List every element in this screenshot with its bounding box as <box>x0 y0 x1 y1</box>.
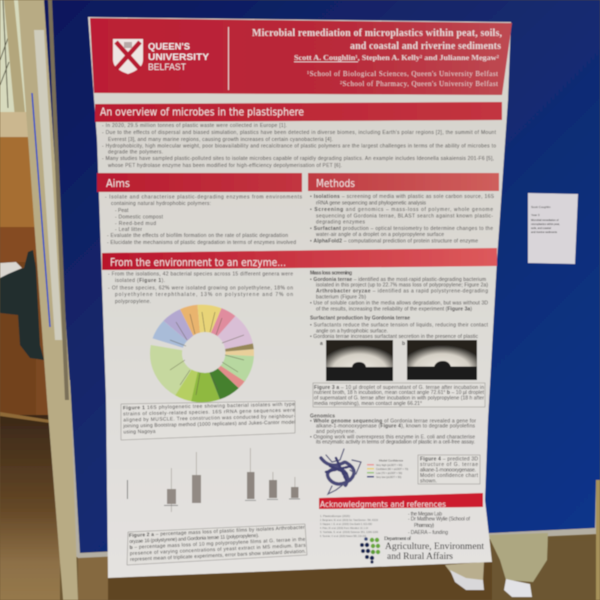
surfactant text <box>310 316 489 340</box>
left shoe <box>450 570 484 590</box>
DAERA wordmark <box>384 535 484 562</box>
model confidence legend: Low (70 > pLDDT > 50) <box>376 472 402 475</box>
overview bullet text <box>102 123 497 169</box>
isolation results text: polyethylene terephthalate, 13% on polystyrene and 7% on <box>115 292 293 298</box>
figure 1 caption: using Nagoya <box>123 429 156 435</box>
mass loss text: bacterium (Figure 2b) <box>316 294 366 300</box>
figure 1 caption: Figure 1 16S phylogenetic tree showing bacterial isolates with type <box>123 402 295 411</box>
affiliations: ¹School of Biological Sciences, Queen's University Belfast <box>307 70 498 78</box>
bar 1 <box>164 468 178 512</box>
model confidence legend: Very low (pLDDT < 50) <box>376 476 401 479</box>
figure 3 caption: of supernatant of G. terrae after incubation in with polypropylene (18 h after <box>314 396 484 402</box>
right shoe <box>504 579 532 597</box>
white cloth <box>0 262 22 278</box>
title: and coastal and riverine sediments <box>350 41 501 52</box>
aims list: - Peat <box>115 208 129 214</box>
logo wordmark <box>148 42 210 73</box>
figure 2 caption: Figure 2 a – percentage mass loss of plastic films by isolates Arthrobacter <box>129 525 305 539</box>
figure 4 caption: alkane-1-monooxygenase. <box>420 468 476 474</box>
isolation results text: - From the isolations, 42 bacterial species across 15 different genera were <box>108 272 293 278</box>
genomics text <box>310 414 476 446</box>
mass loss text: isolated in this project (up to 22.7% mass loss of polypropylene; Figure 2a) <box>316 282 488 288</box>
figure 3 caption: media replenishing), mean contact angle 66.21° <box>314 401 422 407</box>
mass loss text: • Gordonia terrae – identified as the most-rapid plastic-degrading bacterium <box>310 277 486 283</box>
bar 2 <box>192 452 201 503</box>
side note paper: Year 3 <box>531 213 540 217</box>
logo wordmark: QUEEN'S <box>148 42 190 52</box>
heading: acknowledgments: Acknowledgments and references <box>320 500 446 509</box>
genomics text: and polystyrene. <box>316 429 356 435</box>
acknowledgments list <box>408 512 471 536</box>
figure 1 caption: strains of closely-related species. 16S rRNA gene sequences were <box>123 408 295 417</box>
chart: mass loss bars <box>127 448 300 512</box>
figure 3 caption: Figure 3 a – 10 µl droplet of supernatant of G. terrae after incubation in <box>314 385 484 391</box>
aims list: - Leaf litter <box>115 227 142 233</box>
panel: poster sheet <box>88 17 512 578</box>
mass loss text: Arthrobacter oryzae – identified as a rapid polystyrene-degrading <box>316 288 488 294</box>
references: 4. Pinto, M. et al. (2019) Front. Microbiol. 10, 1-14 <box>320 526 368 530</box>
aims list: - Elucidate the mechanisms of plastic degradation in terms of enzymes involved <box>107 240 296 246</box>
figure 1 caption: joining using Bootstrap method (1000 replicates) and Jukes-Cantor model <box>122 420 295 430</box>
methods list: water-air angle of a droplet on a polypropylene surface <box>316 232 444 238</box>
droplet image b: b <box>402 341 405 347</box>
methods list: degrading enzymes <box>316 220 366 226</box>
overview bullet text: - In 2020, 29.5 million tonnes of plastic waste were collected in Europe [1]. <box>102 123 287 129</box>
figure 2 caption: oryzae 16 (polystyrene) and Gordonia terrae 11 (polypropylene). <box>129 533 259 545</box>
references <box>320 514 378 538</box>
overview bullet text: degrade the polymers. <box>108 150 163 156</box>
aims list: - Isolate and characterise plastic-degrading enzymes from environments <box>105 194 302 200</box>
side note paper: soils, and coastal <box>531 226 551 230</box>
aims list: - Domestic compost <box>115 214 164 220</box>
isolation results text <box>108 272 293 305</box>
right leg behind the poster <box>488 533 548 597</box>
icon: DAERA logo <box>360 537 380 564</box>
acknowledgments list: - Dr Matthew Wylie (School of <box>408 516 471 522</box>
droplet image b <box>402 340 477 380</box>
droplet image a <box>320 340 393 381</box>
DAERA wordmark: and Rural Affairs <box>387 551 453 562</box>
aims list: - Reed-bed mud <box>115 221 156 227</box>
overview bullet text: Everest [3], and many marine regions, causing growth increases of certain cyanobacteria [4]. <box>108 137 333 143</box>
overview bullet text: - Hydrophobicity, high molecular weight, poor bioavailability and recalcitrance of plastic polymers are the largest challenges in terms of the ability of microbes to <box>102 144 496 150</box>
figure 3 caption: nutrient broth, 18 h incubation, mean contact angle 72.61° b – 10 µl droplet <box>314 390 485 396</box>
title <box>252 28 502 52</box>
heading: from the environment: From the environment to an enzyme... <box>110 257 286 269</box>
surfactant text: Surfactant production by Gordonia terrae <box>310 316 410 322</box>
surfactant text: • Gordonia terrae increases surfactant secretion in the presence of plastic <box>310 334 478 340</box>
aims list: - Evaluate the effects of biofilm formation on the rate of plastic degradation <box>107 233 288 239</box>
isolation results text: - Of these species, 62% were isolated growing on polyethylene, 18% on <box>108 286 293 292</box>
heading: overview <box>95 102 502 122</box>
overview bullet text: - Many studies have sampled plastic-polluted sites to isolate microbes capable of rapidly degrading plastics. An example includes Ideonella sakaiensis 201-F6 [5], <box>102 156 494 162</box>
figure 4 caption: shown. <box>420 478 437 484</box>
acknowledgments list: Pharmacy) <box>414 523 434 529</box>
methods list <box>310 194 495 244</box>
DAERA wordmark: Department of <box>384 535 411 542</box>
figure 2 caption: represent mean of triplicate experiments, error bars show standard deviation. <box>130 549 306 563</box>
aims list <box>105 194 302 246</box>
left leg behind the poster <box>445 562 484 590</box>
figure 3 caption <box>313 383 485 407</box>
bag on bench <box>0 250 44 360</box>
droplet image a: a <box>320 341 323 347</box>
board frame <box>64 380 600 558</box>
affiliations <box>307 70 498 88</box>
DAERA wordmark: Agriculture, Environment <box>385 542 484 552</box>
mass loss text: Mass loss screening <box>310 270 352 276</box>
isolation results text: isolated (Figure 1). <box>115 278 165 284</box>
bar 4 <box>267 472 278 500</box>
bar 3 <box>245 448 256 501</box>
genomics text: • Whole genome sequencing of Gordonia terrae revealed a gene for <box>310 418 476 424</box>
mass loss text <box>310 270 488 312</box>
surfactant text: • Surfactants reduce the surface tension of liquids, reducing their contact <box>310 322 489 328</box>
genomics text: Genomics <box>310 414 335 420</box>
methods list: • Surfactant production – optical tensiometry to determine changes to the <box>310 226 493 232</box>
figure 2 caption: presence of varying concentrations of yeast extract in MS medium. Bars <box>130 543 306 557</box>
heading: aims: Aims <box>106 178 130 190</box>
heading: methods <box>308 173 499 191</box>
aims list: containing natural hydrophobic polymers: <box>111 201 211 207</box>
figure 2 caption <box>127 524 307 565</box>
mass loss text: • Use of soluble carbon in the media allows degradation, but was without 3D <box>310 300 488 306</box>
isolation results text: polypropylene. <box>115 299 151 305</box>
heading: aims <box>97 173 302 192</box>
icon: university crest <box>113 39 143 74</box>
side note paper: and riverine sediments <box>531 230 558 234</box>
chart: phylogenetic wheel <box>151 306 253 401</box>
figure 4 caption: structure of G. terrae <box>420 462 478 468</box>
logo wordmark: UNIVERSITY <box>148 52 210 63</box>
logo wordmark: BELFAST <box>148 62 186 73</box>
model confidence legend: Model Confidence <box>379 458 404 462</box>
side note paper: Microbial remediation of <box>531 218 559 222</box>
authors: Scott A. Coughlin¹, Stephen A. Kelly² and Julianne Megaw² <box>294 54 499 62</box>
surfactant text: angle on a hydrophobic surface. <box>316 328 388 334</box>
figure 1 caption: aligned by MUSCLE. Tree construction was conducted by neighbour- <box>123 414 296 423</box>
methods list: • AlphaFold2 – computational prediction of protein structure of enzyme <box>310 238 478 244</box>
methods list: • Isolations – screening of media with plastic as sole carbon source, 16S <box>310 194 495 200</box>
title: Microbial remediation of microplastics within peat, soils, <box>252 28 502 39</box>
methods list: sequencing of Gordonia terrae, BLAST search against known plastic- <box>316 214 493 220</box>
affiliations: ²School of Pharmacy, Queen's University Belfast <box>340 80 498 88</box>
genomics text: its enzymatic activity in terms of degradation of plastic in a cell-free assay. <box>316 440 475 446</box>
figure 4 caption: Figure 4 – predicted 3D <box>420 456 478 462</box>
mass loss text: of the results, increasing the reliability of the experiment (Figure 3a) <box>316 306 472 312</box>
methods list: • Screening and genomics – mass-loss of polymer, whole genome <box>310 207 493 213</box>
figure 4 caption <box>418 455 480 484</box>
references: 2. Bergmann, M. et al. (2019) Sci. Total Environ. 784, 43219 <box>320 518 378 522</box>
model confidence legend <box>367 458 408 479</box>
heading: from the environment <box>102 248 497 270</box>
heading: methods: Methods <box>316 178 355 190</box>
figure 1 caption <box>121 401 296 440</box>
model confidence legend: Confident (90 > pLDDT > 70) <box>376 468 408 471</box>
side note paper: Scott Coughlin <box>531 205 551 209</box>
overview bullet text: - Due to the effects of dispersal and biased simulation, plastics have been detected in diverse biomes, including Earth's polar regions [2], the summit of Mount <box>102 130 497 136</box>
protein structure model <box>321 449 361 494</box>
side note paper <box>528 193 578 264</box>
references: 3. Napper, I. E. et al. (2020) One Earth 3, 621-630 <box>320 522 372 526</box>
model confidence legend: Very high (pLDDT > 90) <box>376 464 402 467</box>
heading: overview: An overview of microbes in the plastisphere <box>100 106 304 118</box>
figure 4 caption: Model confidence chart <box>420 473 479 479</box>
acknowledgments list: - the Megaw Lab <box>408 512 442 518</box>
overview bullet text: whose PET hydrolase enzyme has been modified for high-efficiency depolymerisation of PET [6]. <box>108 163 342 169</box>
references: 5. Yoshida, S. et al. (2016) Science 351, 1196-1199 <box>320 530 378 534</box>
side note paper: microplastics within peat, <box>531 222 560 226</box>
references: 6. Tournier, V. et al. (2020) Nature 580, 216-219 <box>320 534 366 538</box>
header band <box>90 18 512 95</box>
methods list: rRNA gene sequencing and phylogenetic analysis <box>316 200 426 206</box>
figure 2 caption: b – percentage mass loss of 10 mg polypropylene films at G. terrae in the <box>129 537 306 551</box>
genomics text: • Ongoing work will overexpress this enzyme in E. coli and characterise <box>310 434 475 440</box>
heading: acknowledgments <box>319 493 483 509</box>
references: 1. PlasticsEurope (2020) <box>320 514 350 518</box>
acknowledgments list: - DAERA – funding <box>408 530 448 536</box>
bar 5 <box>289 477 300 499</box>
genomics text: alkane-1-monooxygenase (Figure 4), known to degrade polyolefins <box>316 424 476 430</box>
